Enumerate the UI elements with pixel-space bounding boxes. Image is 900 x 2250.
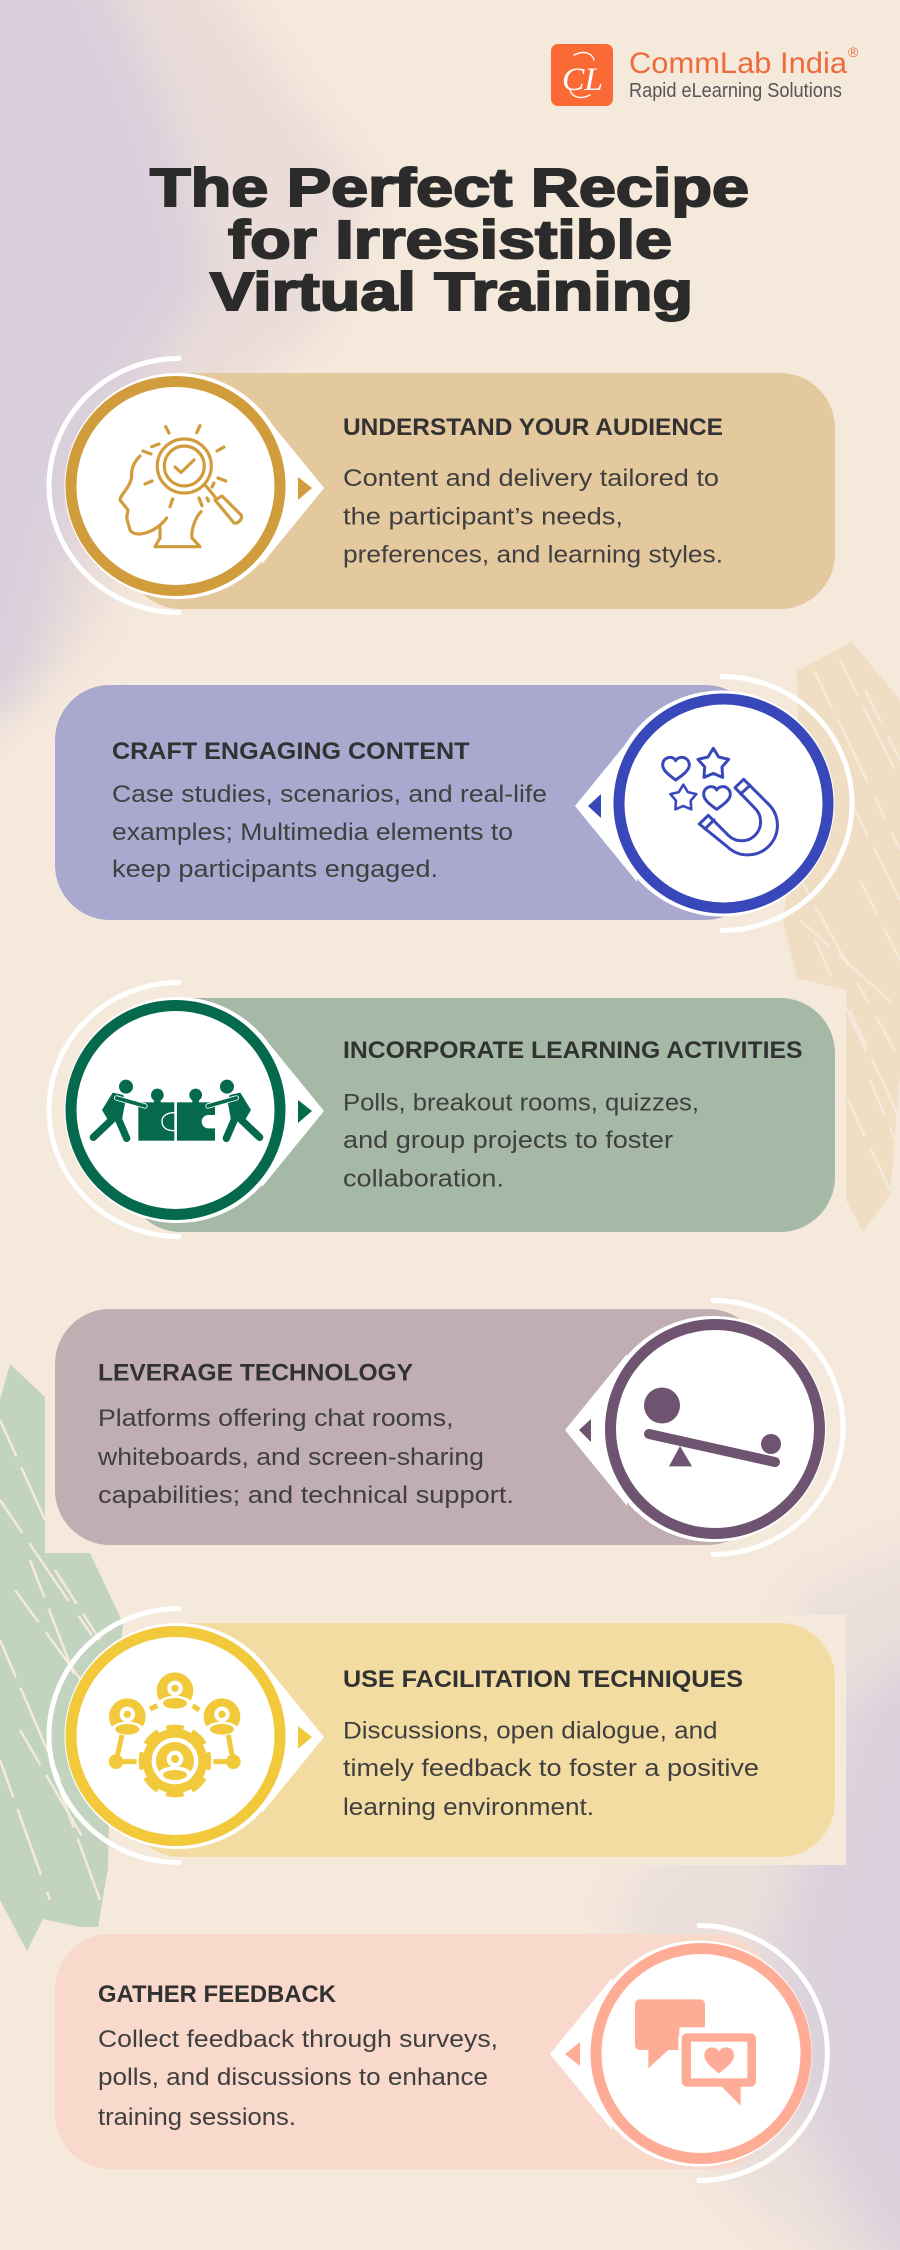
pointer triangle xyxy=(588,794,601,818)
heading: INCORPORATE LEARNING ACTIVITIES xyxy=(343,1037,802,1064)
title xyxy=(150,158,749,322)
body text: Discussions, open dialogue, and xyxy=(343,1718,718,1744)
body text: Polls, breakout rooms, quizzes, xyxy=(343,1090,699,1116)
white outer arc xyxy=(49,1608,179,1862)
white bubble with pointer xyxy=(64,373,324,599)
logo xyxy=(551,44,859,106)
heading: LEVERAGE TECHNOLOGY xyxy=(98,1360,413,1386)
logo mark: CL xyxy=(562,62,603,98)
pointer triangle xyxy=(298,477,312,500)
title: Virtual Training xyxy=(210,262,693,322)
icon: gear with connected people xyxy=(109,1672,241,1794)
body text: Collect feedback through surveys, xyxy=(98,2026,498,2053)
body text: Case studies, scenarios, and real-life xyxy=(112,781,547,808)
icon: head with magnifying glass xyxy=(120,426,241,547)
heading: GATHER FEEDBACK xyxy=(98,1981,336,2008)
body text: examples; Multimedia elements to xyxy=(112,819,513,846)
body text: Content and delivery tailored to xyxy=(343,465,719,492)
pointer triangle xyxy=(298,1100,312,1123)
body text xyxy=(343,1718,759,1821)
icon: seesaw balance xyxy=(644,1388,781,1466)
logo tagline: Rapid eLearning Solutions xyxy=(629,80,842,102)
body text: timely feedback to foster a positive xyxy=(343,1755,759,1782)
panel background xyxy=(55,1309,763,1545)
white outer arc xyxy=(722,676,852,930)
icon: speech bubbles with heart xyxy=(635,1999,759,2106)
pointer triangle xyxy=(298,1726,312,1749)
body text: collaboration. xyxy=(343,1166,504,1192)
white bubble with pointer xyxy=(575,690,834,916)
panel background xyxy=(55,685,760,920)
body text xyxy=(112,781,547,883)
background: purple wash bottom right xyxy=(610,1520,900,2250)
body text: preferences, and learning styles. xyxy=(343,542,723,568)
icon: magnet with hearts and stars xyxy=(663,748,777,855)
body text: training sessions. xyxy=(98,2104,296,2131)
panel: craft engaging content xyxy=(55,676,852,930)
body text xyxy=(343,465,723,568)
body text xyxy=(343,1090,699,1192)
logo registered mark: ® xyxy=(848,44,859,60)
logo name: CommLab India xyxy=(629,47,847,80)
body text: capabilities; and technical support. xyxy=(98,1482,514,1509)
body text: the participant’s needs, xyxy=(343,504,623,530)
white outer arc xyxy=(49,358,179,612)
body text: learning environment. xyxy=(343,1794,594,1821)
white outer arc xyxy=(713,1300,843,1554)
panel: incorporate learning activities xyxy=(49,982,835,1236)
ring xyxy=(71,1006,280,1214)
white outer arc xyxy=(49,982,179,1236)
logo mark xyxy=(551,44,613,106)
panel: leverage technology xyxy=(55,1300,843,1554)
ring xyxy=(71,382,280,590)
body text: and group projects to foster xyxy=(343,1127,673,1154)
pointer triangle xyxy=(579,1419,591,1442)
body text: Platforms offering chat rooms, xyxy=(98,1405,454,1432)
body text: keep participants engaged. xyxy=(112,856,438,883)
background: purple wash top left xyxy=(0,0,370,760)
background: tan brush stroke xyxy=(783,642,900,1232)
panel background xyxy=(126,1623,835,1857)
panel background xyxy=(126,373,835,609)
panel background xyxy=(126,998,835,1232)
ring xyxy=(596,1948,806,2158)
body text: whiteboards, and screen-sharing xyxy=(97,1444,484,1471)
body text: polls, and discussions to enhance xyxy=(98,2064,488,2091)
panel background xyxy=(55,1934,770,2169)
ring xyxy=(71,1632,280,1840)
panel: gather feedback xyxy=(55,1926,827,2180)
ring xyxy=(610,1324,820,1534)
heading: CRAFT ENGAGING CONTENT xyxy=(112,738,470,765)
white bubble with pointer xyxy=(565,1316,826,1542)
heading: UNDERSTAND YOUR AUDIENCE xyxy=(343,414,723,441)
body text xyxy=(97,1405,514,1509)
background: green brush stroke xyxy=(0,1364,123,1951)
icon: people joining puzzle pieces xyxy=(93,1080,260,1141)
white outer arc xyxy=(699,1926,827,2180)
ring xyxy=(619,699,828,908)
white bubble with pointer xyxy=(550,1940,812,2166)
white bubble with pointer xyxy=(64,1623,324,1849)
pointer triangle xyxy=(565,2042,580,2066)
heading: USE FACILITATION TECHNIQUES xyxy=(343,1666,743,1693)
panel: use facilitation techniques xyxy=(49,1608,835,1862)
panel: understand your audience xyxy=(49,358,835,612)
white bubble with pointer xyxy=(64,997,324,1223)
title: for Irresistible xyxy=(228,210,672,270)
background: cut-out blocks behind panels xyxy=(46,990,846,1865)
body text xyxy=(98,2026,498,2131)
title: The Perfect Recipe xyxy=(150,158,749,218)
